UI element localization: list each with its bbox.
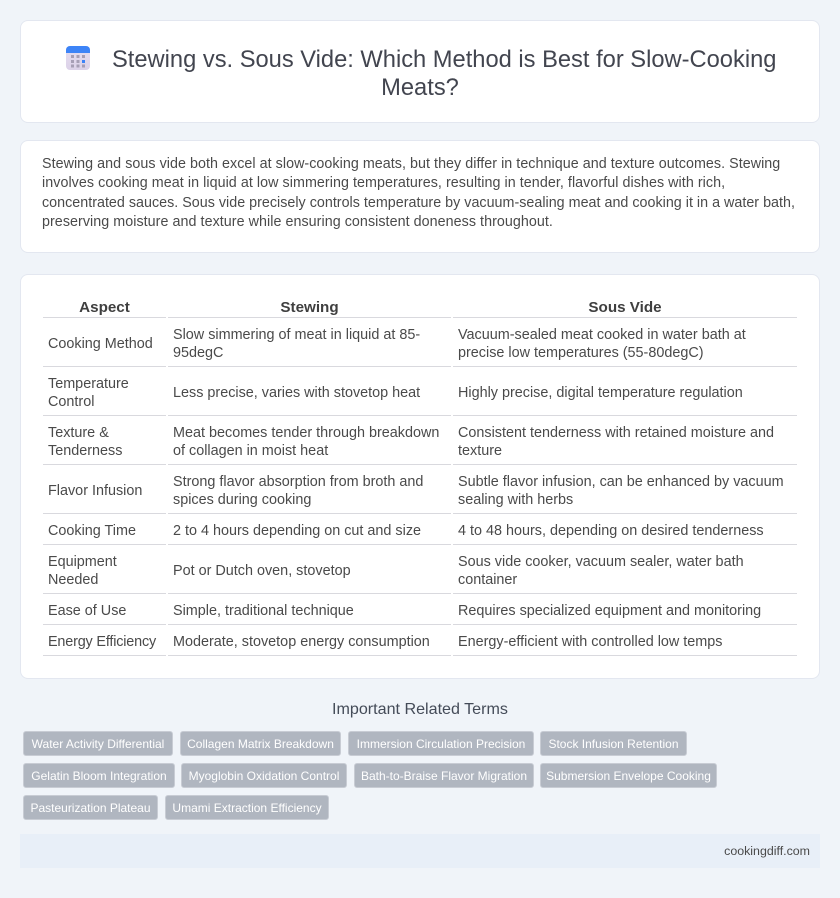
panel: comparison table: Pot or Dutch oven, stovetop [173,562,351,578]
title [112,47,776,101]
panel: comparison table: Energy Efficiency [48,634,156,650]
panel: comparison table: Less precise, varies with stovetop heat [173,384,420,400]
panel: comparison table: Texture & [48,424,109,440]
tags: related terms: Water Activity Differential [32,737,164,751]
heading: related terms: Important Related Terms [332,700,508,718]
panel: comparison table [20,274,820,679]
panel: comparison table: 95degC [173,344,223,360]
panel: comparison table: Slow simmering of meat in liquid at 85- [173,326,420,342]
panel: comparison table: Aspect [79,299,130,316]
panel: comparison table: Flavor Infusion [48,482,142,498]
panel: comparison table: Tenderness [48,442,122,458]
panel: introduction: preserving moisture and texture while ensuring consistent doneness throughout. [42,214,553,230]
panel: comparison table: Strong flavor absorption from broth and [173,474,423,490]
footer [20,834,820,868]
panel: comparison table: Meat becomes tender through breakdown [173,424,439,440]
panel: comparison table: Requires specialized equipment and monitoring [458,602,761,618]
panel: comparison table: Energy-efficient with controlled low temps [458,634,722,650]
icon: calendar [66,46,90,70]
tags: related terms: Umami Extraction Efficiency [172,801,322,815]
panel: introduction: Stewing and sous vide both excel at slow-cooking meats, but they differ in technique and texture outcomes. Stewing [42,156,780,172]
title: Stewing vs. Sous Vide: Which Method is Best for Slow-Cooking [112,47,776,73]
panel: comparison table: Moderate, stovetop energy consumption [173,634,430,650]
panel: comparison table: container [458,572,517,588]
panel: comparison table: Control [48,394,94,410]
tags: related terms: Stock Infusion Retention [548,737,679,751]
footer link text: cookingdiff.com [724,844,810,858]
panel: introduction: involves cooking meat in liquid at low simmering temperatures, resulting in tender, flavorful dishes with rich, [42,175,725,191]
panel: comparison table: Needed [48,572,98,588]
panel: comparison table: precise low temperatures (55-80degC) [458,344,704,360]
panel: comparison table: of collagen in moist heat [173,442,328,458]
panel: introduction: concentrated sauces. Sous vide precisely controls temperature by vacuum-sealing meat and cooking it in a water bath, [42,195,795,211]
panel: comparison table: sealing with herbs [458,492,573,508]
panel: comparison table: texture [458,442,502,458]
tags: related terms: Myoglobin Oxidation Control [189,769,339,783]
panel: comparison table: Ease of Use [48,602,126,618]
panel: comparison table: spices during cooking [173,492,311,508]
tags: related terms: Gelatin Bloom Integration [31,769,167,783]
panel: introduction [20,140,820,253]
panel: comparison table: Sous Vide [588,299,662,316]
panel: comparison table: Highly precise, digital temperature regulation [458,384,743,400]
panel: comparison table: Cooking Method [48,336,153,352]
panel: comparison table: Consistent tenderness with retained moisture and [458,424,774,440]
panel: comparison table: Subtle flavor infusion, can be enhanced by vacuum [458,474,784,490]
tags: related terms: Bath-to-Braise Flavor Migration [361,769,527,783]
tags: related terms: Collagen Matrix Breakdown [187,737,334,751]
tags: related terms: Pasteurization Plateau [30,801,151,815]
panel: comparison table: Equipment [48,554,117,570]
panel: comparison table: 4 to 48 hours, depending on desired tenderness [458,522,764,538]
panel: comparison table: Sous vide cooker, vacuum sealer, water bath [458,554,744,570]
header card [20,20,820,123]
tags: related terms: Immersion Circulation Precision [357,737,525,751]
tags: related terms: Submersion Envelope Cooking [546,769,711,783]
title: Meats? [381,75,459,101]
panel: comparison table: Temperature [48,376,129,392]
panel: comparison table: Stewing [280,299,339,316]
panel: comparison table: Cooking Time [48,522,136,538]
panel: comparison table: Simple, traditional technique [173,602,354,618]
panel: comparison table: 2 to 4 hours depending on cut and size [173,522,421,538]
panel: comparison table: Vacuum-sealed meat cooked in water bath at [458,326,746,342]
